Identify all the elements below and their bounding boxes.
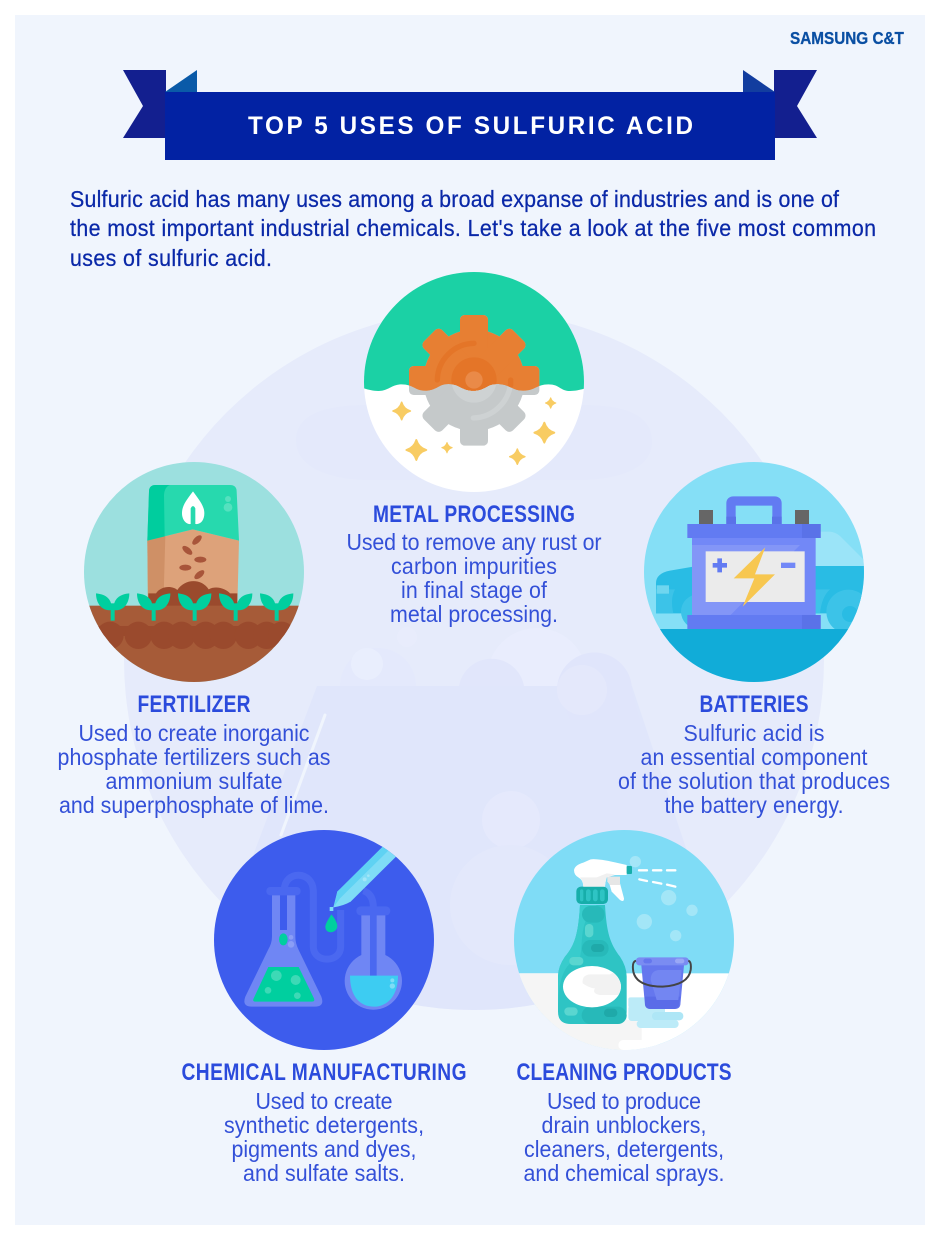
intro text: Sulfuric acid has many uses among a broad expanse of industries and is one of <box>70 186 840 212</box>
block: fertilizer: Used to create inorganic <box>78 720 310 746</box>
logo: SAMSUNG C&T <box>790 28 905 48</box>
block: batteries: of the solution that produces <box>618 768 890 794</box>
block: chemical manufacturing: and sulfate salts. <box>243 1160 405 1186</box>
heading: cleaning products: CLEANING PRODUCTS <box>516 1058 732 1086</box>
icon: chemistry flasks <box>214 830 434 1050</box>
heading: batteries: BATTERIES <box>699 690 809 718</box>
block: fertilizer <box>58 690 330 818</box>
block: chemical manufacturing: pigments and dyes, <box>232 1136 416 1162</box>
block: batteries <box>618 690 890 818</box>
block: batteries: Sulfuric acid is <box>684 720 824 746</box>
block: metal processing <box>346 500 602 627</box>
block: batteries: an essential component <box>640 744 868 770</box>
icon: car battery <box>644 462 864 682</box>
icon: fertilizer bag and sprouts <box>84 462 304 682</box>
block: chemical manufacturing <box>181 1058 467 1186</box>
intro text: uses of sulfuric acid. <box>70 245 272 271</box>
block: fertilizer: and superphosphate of lime. <box>59 792 329 818</box>
intro text: the most important industrial chemicals. Let's take a look at the five most common <box>70 215 876 241</box>
block: metal processing: metal processing. <box>390 601 558 627</box>
heading: fertilizer: FERTILIZER <box>137 690 251 718</box>
block: chemical manufacturing: Used to create <box>256 1088 392 1114</box>
block: chemical manufacturing: synthetic detergents, <box>224 1112 424 1138</box>
block: metal processing: carbon impurities <box>391 553 557 579</box>
block: batteries: the battery energy. <box>664 792 844 818</box>
title ribbon <box>123 70 817 160</box>
background watermark circle <box>124 310 824 1010</box>
block: cleaning products: drain unblockers, <box>542 1112 706 1138</box>
block: cleaning products: cleaners, detergents, <box>524 1136 724 1162</box>
heading: metal processing: METAL PROCESSING <box>373 500 575 528</box>
icon: cleaning spray and bucket <box>514 830 734 1050</box>
heading: chemical manufacturing: CHEMICAL MANUFACTURING <box>181 1058 467 1086</box>
icon: metal processing gear <box>364 272 584 492</box>
block: fertilizer: phosphate fertilizers such as <box>58 744 330 770</box>
block: cleaning products: and chemical sprays. <box>524 1160 724 1186</box>
block: cleaning products <box>516 1058 732 1186</box>
block: metal processing: in final stage of <box>401 577 548 603</box>
block: metal processing: Used to remove any rust or <box>346 529 602 555</box>
title: TOP 5 USES OF SULFURIC ACID <box>248 113 693 140</box>
intro text <box>70 186 876 271</box>
block: fertilizer: ammonium sulfate <box>106 768 282 794</box>
block: cleaning products: Used to produce <box>547 1088 701 1114</box>
